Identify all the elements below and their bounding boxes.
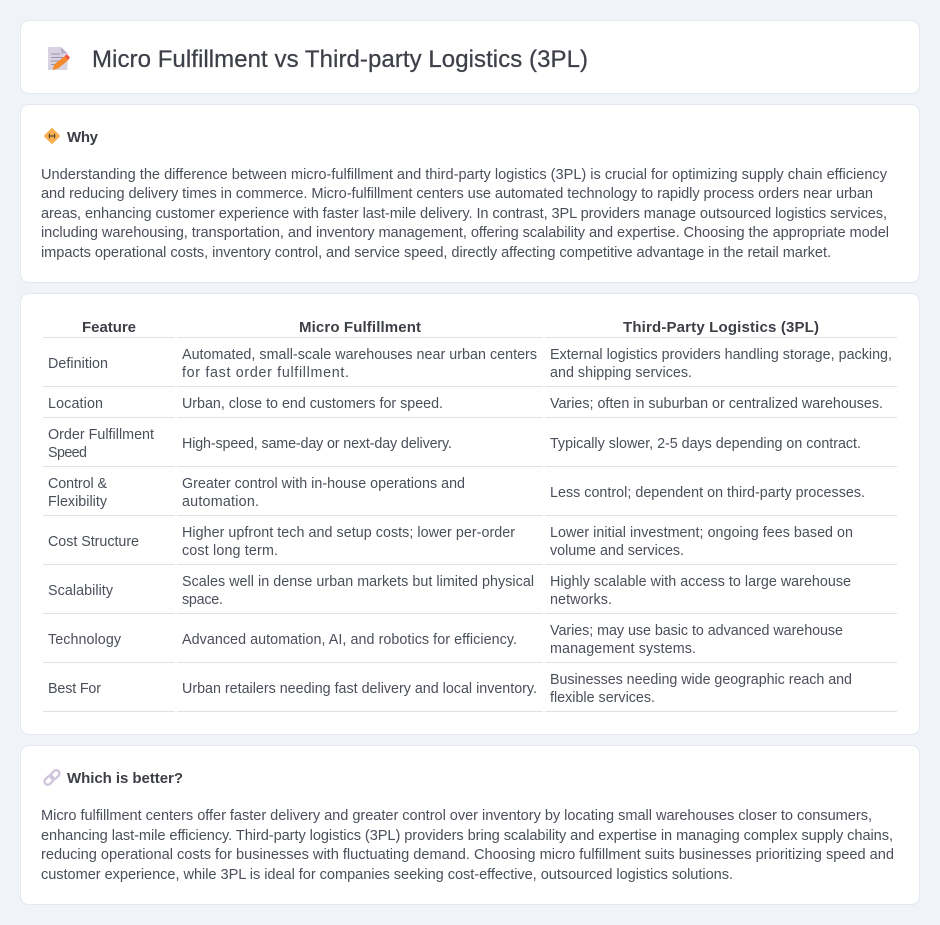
text block: why — [41, 167, 889, 261]
row: scalability: networks. — [550, 592, 612, 608]
text block: which is better — [41, 808, 894, 883]
row: definition: Automated, small-scale warehouses near urban centers — [182, 347, 537, 363]
panel: why — [20, 104, 920, 282]
title: Micro Fulfillment vs Third-party Logistics (3PL) — [92, 46, 588, 73]
panel: comparison table — [20, 294, 920, 734]
row: control and flexibility: Control & — [48, 476, 107, 492]
text block: why: impacts operational costs, inventory control, and service speed, directly affecting competitive advantage in the retail market. — [41, 245, 831, 261]
row: scalability: space. — [182, 592, 223, 608]
table header row — [43, 319, 897, 338]
row: technology: management systems. — [550, 641, 696, 657]
table header row: Micro Fulfillment — [299, 319, 421, 336]
text block: why: including warehousing, transportation, and inventory management, offering scalability and expertise. Choosing the appropriate model — [41, 225, 889, 241]
icon: diamond sign — [44, 128, 60, 144]
text block: which is better: Micro fulfillment centers offer faster delivery and greater control over inventory by locating small warehouses closer to consumers, — [41, 808, 872, 824]
row: cost structure: volume and services. — [550, 543, 684, 559]
row: control and flexibility: Flexibility — [48, 494, 108, 510]
text block: why: and reducing delivery times in commerce. Micro-fulfillment centers use automated technology to rapidly process orders near urban — [41, 186, 873, 202]
row: definition: Definition — [48, 356, 108, 372]
table header row: Feature — [82, 319, 136, 336]
row: control and flexibility: Greater control with in-house operations and — [182, 476, 465, 492]
row: definition: for fast order fulfillment. — [182, 365, 349, 381]
row: technology — [43, 623, 897, 662]
row: definition: and shipping services. — [550, 365, 692, 381]
row: control and flexibility: Less control; dependent on third-party processes. — [550, 485, 865, 501]
row: technology: Advanced automation, AI, and robotics for efficiency. — [182, 632, 517, 648]
row: definition: External logistics providers handling storage, packing, — [550, 347, 892, 363]
row: cost structure: Higher upfront tech and setup costs; lower per-order — [182, 525, 515, 541]
row: order fulfillment speed: Typically slower, 2-5 days depending on contract. — [550, 436, 861, 452]
icon: link — [43, 769, 61, 786]
row: control and flexibility — [43, 476, 897, 516]
row: location: Urban, close to end customers for speed. — [182, 396, 443, 412]
row: scalability: Scalability — [48, 583, 114, 599]
text block: which is better: reducing operational costs for businesses with fluctuating demand. Choosing micro fulfillment suits businesses prioritizing speed and — [41, 847, 894, 863]
row: order fulfillment speed: High-speed, same-day or next-day delivery. — [182, 436, 452, 452]
row: best for: Best For — [48, 681, 101, 697]
row: best for: Businesses needing wide geographic reach and — [550, 672, 852, 688]
row: cost structure: cost long term. — [182, 543, 278, 559]
row: location — [43, 396, 897, 418]
row: best for: Urban retailers needing fast delivery and local inventory. — [182, 681, 537, 697]
heading: why: Why — [67, 129, 99, 146]
row: scalability — [43, 574, 897, 614]
row: location: Location — [48, 396, 103, 412]
row: order fulfillment speed: Speed — [48, 445, 87, 461]
row: location: Varies; often in suburban or centralized warehouses. — [550, 396, 883, 412]
icon: memo with pencil — [48, 47, 70, 70]
text block: which is better: customer experience, while 3PL is ideal for companies seeking cost-effective, outsourced logistics solutions. — [41, 867, 733, 883]
row: best for: flexible services. — [550, 690, 655, 706]
row: definition — [43, 347, 897, 386]
row: cost structure: Cost Structure — [48, 534, 139, 550]
panel: which is better — [20, 746, 920, 904]
row: cost structure — [43, 525, 897, 564]
row: order fulfillment speed — [43, 427, 897, 466]
text block: which is better: enhancing last-mile efficiency. Third-party logistics (3PL) providers bring scalability and expertise in managing complex supply chains, — [41, 828, 893, 844]
table header row: Third-Party Logistics (3PL) — [623, 319, 819, 336]
row: scalability: Highly scalable with access to large warehouse — [550, 574, 851, 590]
row: cost structure: Lower initial investment; ongoing fees based on — [550, 525, 853, 541]
row: order fulfillment speed: Order Fulfillment — [48, 427, 154, 443]
row: control and flexibility: automation. — [182, 494, 259, 510]
row: best for — [43, 672, 897, 712]
row: technology: Technology — [48, 632, 122, 648]
row: scalability: Scales well in dense urban markets but limited physical — [182, 574, 534, 590]
heading: which is better: Which is better? — [67, 770, 183, 787]
panel: header — [20, 20, 920, 94]
text block: why: Understanding the difference between micro-fulfillment and third-party logistics (3PL) is crucial for optimizing supply chain efficiency — [41, 167, 888, 183]
text block: why: areas, enhancing customer experience with faster last-mile delivery. In contrast, 3PL providers manage outsourced logistics services, — [41, 206, 887, 222]
row: technology: Varies; may use basic to advanced warehouse — [550, 623, 843, 639]
